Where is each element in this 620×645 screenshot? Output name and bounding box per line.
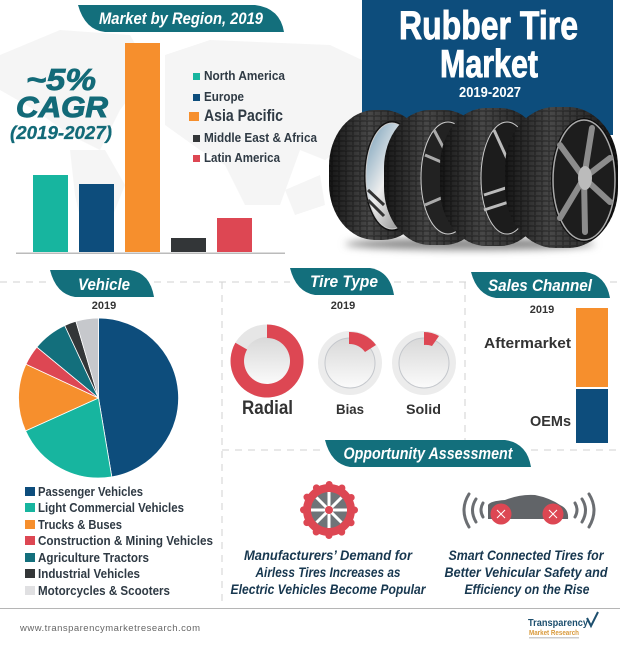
banner: Opportunity Assessment [325,440,531,467]
stacked bar: sales channel [484,308,608,443]
banner: Tire Type [290,268,394,295]
donut: Solid [396,332,452,392]
year label: 2019 [331,300,355,312]
banner: Opportunity Assessment: Opportunity Assessment [344,444,514,463]
stacked bar: sales channel: OEMs [530,413,571,430]
legend: regions [189,68,318,165]
banner: Sales Channel [471,272,610,298]
label: Bias: Bias [336,401,364,417]
legend: vehicle: Trucks & Buses [38,517,122,532]
footer url: www.transparencymarketresearch.com [19,623,200,634]
tire 2 [384,110,490,245]
CAGR callout: CAGR [16,92,108,124]
legend: vehicle: Industrial Vehicles [38,566,140,581]
text: airless tires: Airless Tires Increases as [255,564,401,580]
world map background [0,30,362,240]
title panel: 2019-2027 [459,84,521,101]
legend: vehicle: Motorcycles & Scooters [38,583,170,598]
legend: vehicle: Agriculture Tractors [38,550,149,565]
tire 3 [440,108,546,246]
tire 4 with alloy wheel [505,107,618,248]
icon: connected car [464,494,594,527]
legend: regions: North America [204,68,286,83]
bar chart: market by region [16,43,285,254]
banner: Tire Type: Tire Type [310,272,378,291]
stacked bar: sales channel: Aftermarket [484,335,571,352]
label: Radial: Radial [242,398,293,419]
legend: regions: Middle East & Africa [204,130,318,145]
icon: airless tire [303,484,355,536]
text: airless tires: Electric Vehicles Become Popular [230,581,427,597]
dashed dividers [0,282,620,605]
CAGR callout [10,62,112,143]
tire 1 [329,110,429,240]
text: smart tires [444,547,608,597]
banner: Market by Region: Market by Region, 2019 [99,9,263,28]
legend: regions: Europe [204,89,244,104]
text: airless tires [230,547,427,597]
legend: regions: Latin America [204,150,281,165]
donut: Bias [322,332,378,392]
donut: Radial [231,324,304,397]
pie chart: vehicle [19,318,179,478]
year label: 2019 [530,304,554,316]
label: Solid: Solid [406,401,441,417]
title panel [362,0,613,135]
legend: vehicle [25,484,213,598]
banner: Vehicle: Vehicle [78,275,130,294]
tire photo [329,107,618,250]
legend: vehicle: Construction & Mining Vehicles [38,533,213,548]
legend: regions: Asia Pacific [204,106,283,125]
legend: vehicle: Passenger Vehicles [38,484,143,499]
banner: Market by Region [78,5,284,32]
banner: Vehicle [50,270,154,297]
CAGR callout: ~5% [26,62,96,97]
text: smart tires: Efficiency on the Rise [464,581,590,597]
year label: 2019 [92,300,116,312]
legend: vehicle: Light Commercial Vehicles [38,500,184,515]
logo: Market Research [529,628,579,637]
logo [528,612,598,638]
logo: Transparency [528,618,588,629]
text: airless tires: Manufacturers’ Demand for [244,547,413,563]
title panel: Rubber Tire [399,4,578,48]
text: smart tires: Smart Connected Tires for [448,547,605,563]
CAGR callout: (2019-2027) [10,123,112,143]
title panel: Market [440,43,538,86]
banner: Sales Channel: Sales Channel [488,276,593,295]
